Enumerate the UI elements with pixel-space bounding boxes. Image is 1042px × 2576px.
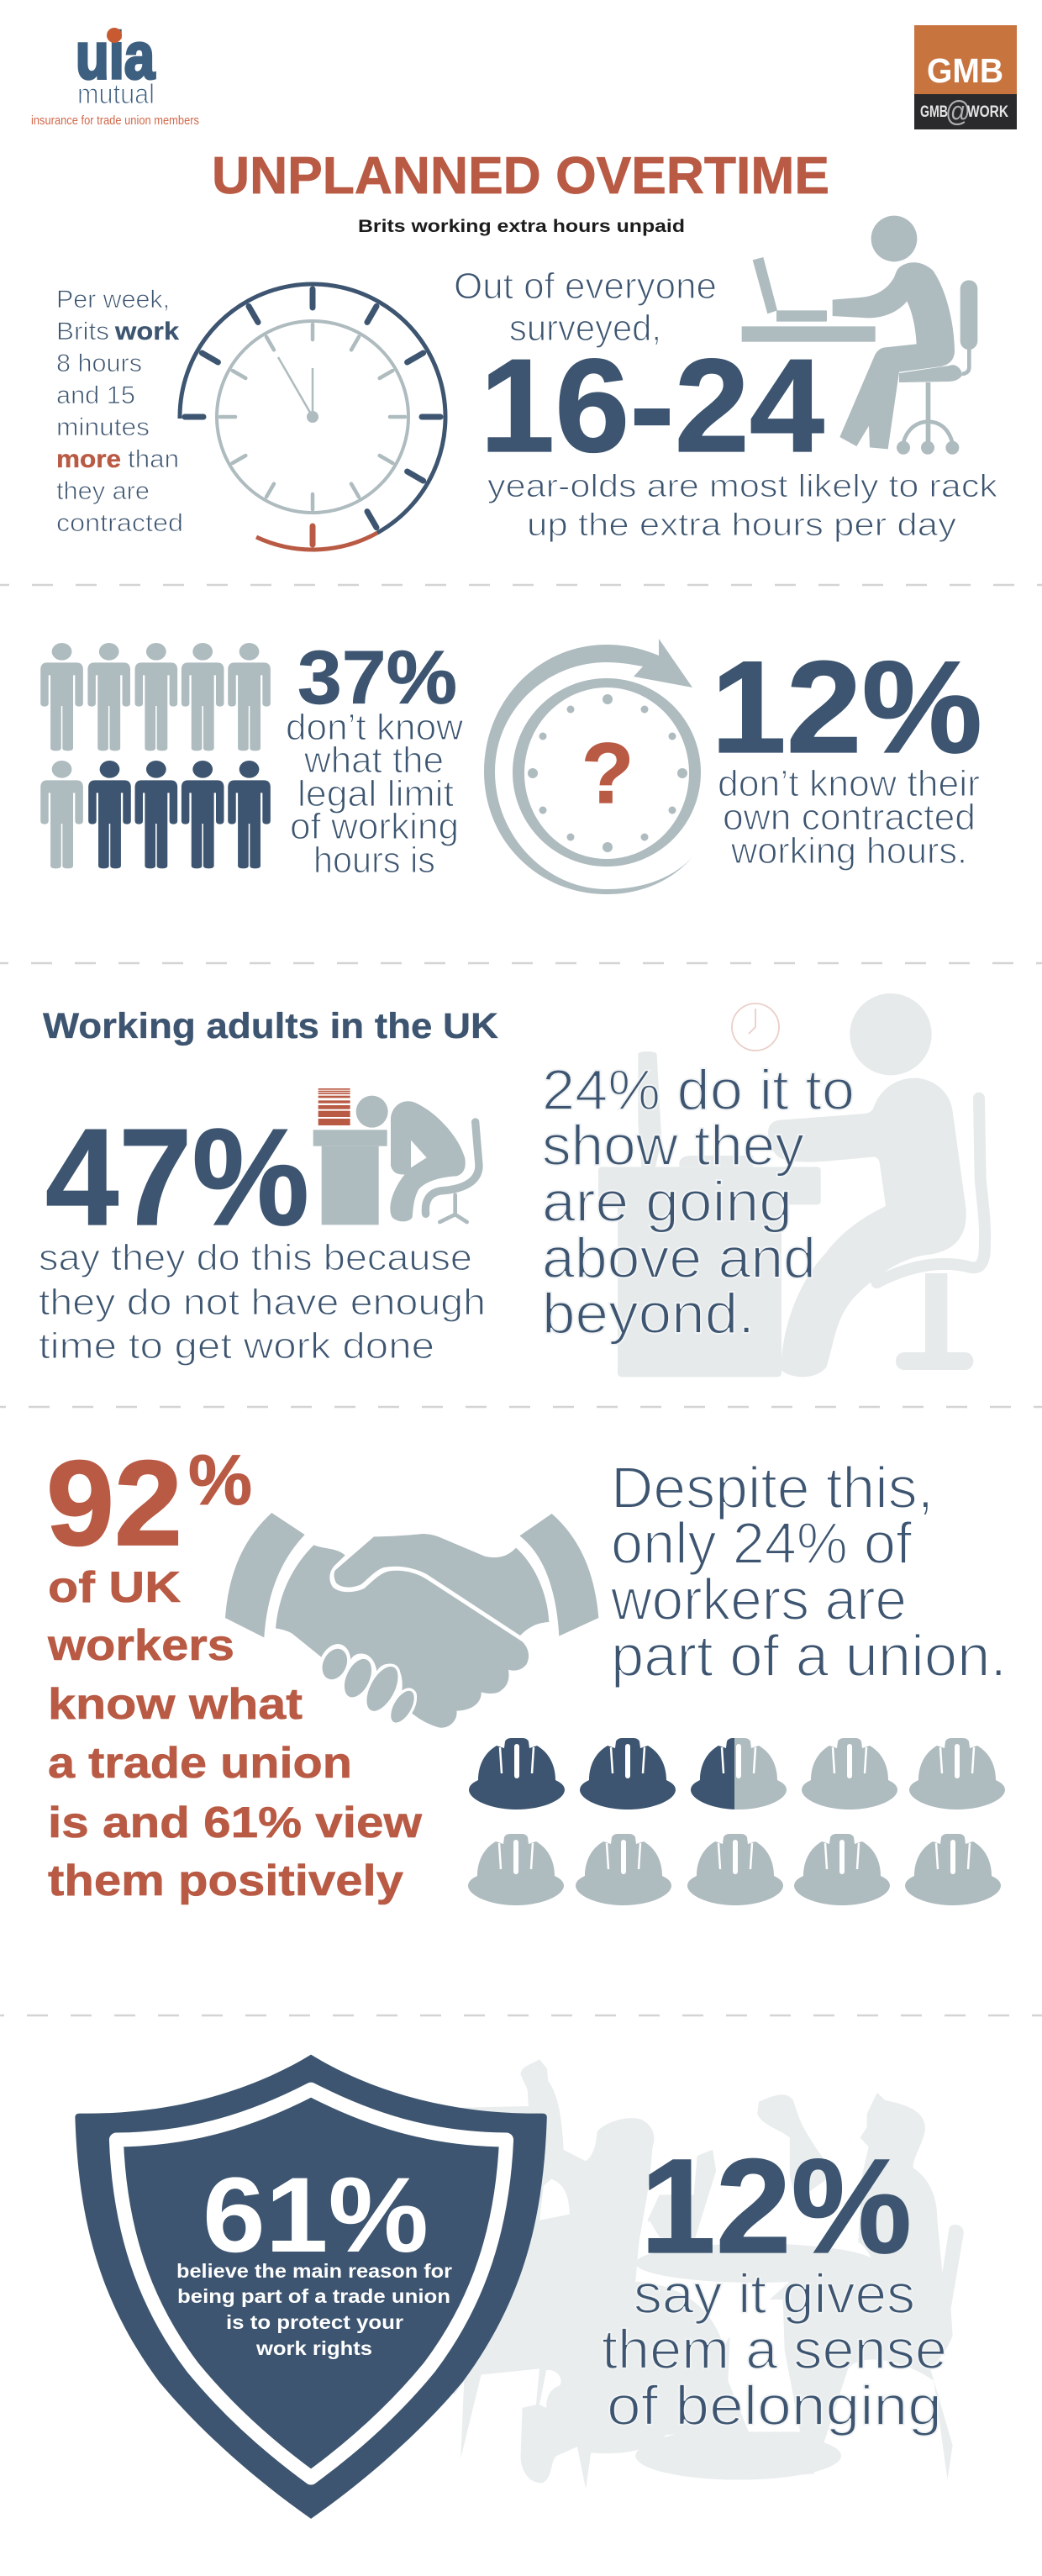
text: 24% above and beyond (542, 1058, 855, 1346)
text: sense of belonging: of belonging (607, 2374, 942, 2436)
text: per week (56, 286, 183, 537)
text: year-olds: up the extra hours per day (527, 508, 956, 543)
icon: hard hats 2.5 of 10 (468, 1738, 1005, 1905)
text: per week: work (114, 318, 179, 345)
icon: faded group around a table (454, 2059, 964, 2489)
statistic: 16-24: 16-24 (480, 332, 824, 480)
text: year-olds: year-olds are most likely to rack (487, 469, 998, 504)
text: 24% above and beyond: beyond. (542, 1282, 755, 1346)
icon: person at laptop (742, 216, 977, 455)
panel: working adults (39, 993, 985, 1377)
icon: clock with arrow and question mark: ? (582, 725, 634, 821)
statistic: 92%: % (188, 1441, 252, 1520)
subtitle: Brits working extra hours unpaid (358, 217, 685, 236)
text: 24% above and beyond: are going (542, 1170, 792, 1234)
text: of UK workers: workers (47, 1621, 234, 1670)
text: per week: than (128, 445, 179, 473)
text: 24% above and beyond: show they (542, 1114, 804, 1177)
text: despite this: part of a union. (611, 1623, 1007, 1688)
text: legal limit: of working (290, 806, 459, 847)
icon: clock (180, 284, 445, 550)
statistic: 92% (46, 1436, 252, 1571)
heading: Working adults in the UK (43, 1006, 498, 1046)
text: contracted hours: working hours. (730, 830, 967, 872)
statistic: 61%: 61% (203, 2155, 429, 2274)
icon: people 5 of 10 (40, 643, 271, 868)
text: per week: minutes (56, 414, 150, 441)
text: contracted hours (718, 763, 980, 872)
text: of UK workers: know what (48, 1680, 303, 1729)
text: out of everyone surveyed: surveyed, (509, 308, 661, 349)
text: not enough time: say they do this because (39, 1237, 472, 1278)
text: per week: more (56, 445, 121, 473)
text: protect work rights: is to protect your (226, 2311, 403, 2333)
text: legal limit: don’t know (286, 707, 463, 748)
title: UNPLANNED OVERTIME (212, 147, 829, 205)
text: protect work rights: work rights (255, 2337, 372, 2359)
statistic: 12% belonging: 12% (640, 2131, 912, 2281)
text: out of everyone surveyed (454, 266, 717, 349)
text: protect work rights (176, 2260, 452, 2359)
logo: UIA mutual (31, 18, 199, 128)
text: legal limit: hours is (313, 840, 435, 881)
text: not enough time: they do not have enough (39, 1282, 486, 1323)
text: per week: 8 hours (56, 350, 142, 377)
text: protect work rights: believe the main reason for (176, 2260, 452, 2282)
statistic: 47%: 47% (45, 1100, 309, 1254)
text: per week: Brits (56, 318, 109, 345)
logo: GMB at work: @ (945, 96, 971, 128)
text: out of everyone surveyed: Out of everyone (454, 266, 717, 307)
icon: faded wall clock (732, 1004, 779, 1051)
text: of UK workers: a trade union (48, 1739, 352, 1788)
text: contracted hours: own contracted (723, 797, 976, 838)
text: sense of belonging: say it gives (634, 2263, 915, 2325)
text: legal limit: legal limit (297, 773, 454, 814)
text: protect work rights: being part of a trade union (177, 2285, 450, 2307)
logo: GMB at work: WORK (967, 103, 1008, 121)
text: per week: Per week, (56, 286, 170, 313)
statistic: 92%: 92 (46, 1436, 182, 1571)
text: 24% above and beyond: above and (542, 1226, 816, 1290)
text: of UK workers: is and 61% view (48, 1799, 423, 1847)
logo: UIA mutual: mutual (77, 78, 155, 109)
logo: GMB at work: GMB (927, 51, 1003, 90)
icon: handshake (225, 1513, 598, 1728)
text: of UK workers (47, 1563, 423, 1905)
text: contracted hours: don’t know their (718, 763, 980, 804)
text: not enough time (39, 1237, 486, 1367)
text: despite this: Despite this, (611, 1455, 934, 1520)
text: despite this: only 24% of (611, 1510, 913, 1576)
text: of UK workers: them positively (48, 1857, 403, 1905)
text: 24% above and beyond: 24% do it to (542, 1058, 855, 1122)
panel: legal limit (40, 635, 982, 894)
icon: slumped worker at desk (313, 1088, 479, 1225)
statistic: 12%: 12% (711, 635, 982, 781)
panel: weekly overtime (56, 216, 998, 550)
text: despite this: workers are (610, 1567, 907, 1632)
text: year-olds (487, 469, 998, 543)
logo: UIA mutual: uia (76, 18, 155, 92)
text: legal limit: what the (303, 740, 444, 781)
text: sense of belonging: them a sense (602, 2318, 947, 2380)
logo: GMB at work: GMB (920, 103, 948, 121)
text: despite this (610, 1455, 1007, 1688)
text: sense of belonging (602, 2263, 947, 2436)
statistic: 37%: 37% (297, 636, 457, 720)
icon: shield (75, 2055, 547, 2519)
panel: trade union awareness (46, 1436, 1007, 1905)
text: per week: contracted (56, 509, 183, 537)
text: legal limit (286, 707, 463, 881)
icon: faded person at desk (598, 993, 985, 1377)
panel: why join a union (75, 2055, 964, 2519)
icon: clock with arrow and question mark (484, 639, 701, 894)
text: per week: they are (56, 477, 150, 505)
text: of UK workers: of UK (48, 1563, 182, 1612)
logo: GMB at work (914, 25, 1017, 129)
logo: UIA mutual: insurance for trade union members (31, 113, 199, 128)
text: not enough time: time to get work done (39, 1325, 434, 1367)
text: per week: and 15 (56, 382, 135, 409)
